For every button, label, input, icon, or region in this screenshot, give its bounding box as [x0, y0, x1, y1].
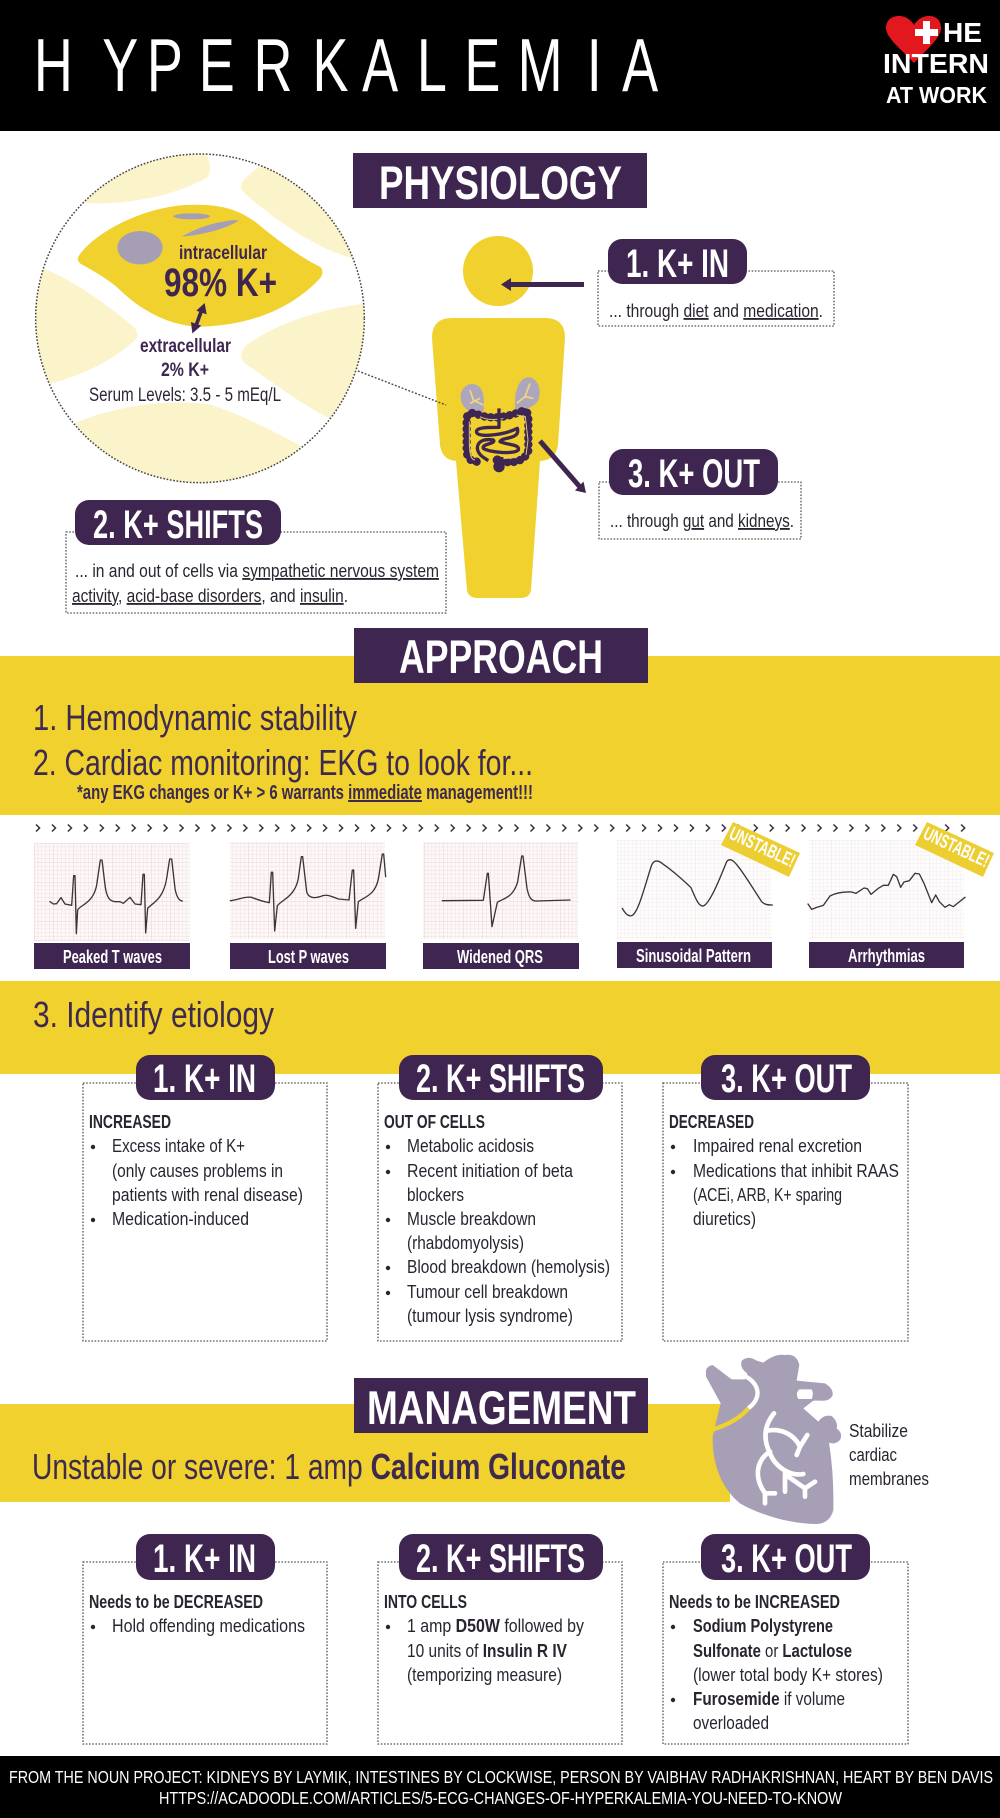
text: stabilize cardiac membranes: Stabilize — [849, 1420, 908, 1441]
logo: The Intern at Work: AT WORK — [886, 82, 987, 108]
etiology panel: K+ shifts: blockers — [407, 1184, 464, 1205]
etiology panel: K+ shifts: Metabolic acidosis — [407, 1135, 534, 1156]
text: stabilize cardiac membranes: membranes — [849, 1468, 929, 1489]
etiology panel: K+ out: DECREASED — [669, 1111, 754, 1132]
management panel: K+ shifts — [378, 1534, 622, 1744]
callout: K+ shifts: ... in and out of cells via sympathetic nervous system — [75, 560, 439, 581]
ekg: lost P waves: Lost P waves — [268, 947, 349, 967]
management panel: K+ in: Hold offending medications — [112, 1615, 305, 1636]
callout: K+ in: ... through diet and medication. — [609, 300, 823, 321]
management panel: K+ out: overloaded — [693, 1712, 769, 1733]
etiology panel: K+ in — [83, 1055, 327, 1341]
footer credits: HTTPS://ACADOODLE.COM/ARTICLES/5-ECG-CHANGES-OF-HYPERKALEMIA-YOU-NEED-TO-KNOW — [159, 1788, 842, 1808]
management panel: K+ out — [663, 1534, 908, 1744]
band: identify etiology: 3. Identify etiology — [33, 994, 274, 1035]
heading: Management: MANAGEMENT — [367, 1381, 636, 1434]
etiology panel: K+ shifts: Tumour cell breakdown — [407, 1281, 568, 1302]
kidneys and intestines — [461, 377, 540, 472]
callout: K+ shifts: activity, acid-base disorders, and insulin. — [72, 585, 348, 606]
ekg: widened QRS: Widened QRS — [457, 947, 543, 967]
logo: The Intern at Work: INTERN — [883, 48, 989, 79]
ekg: peaked T waves — [34, 843, 190, 969]
management panel: K+ shifts: 1 amp D50W followed by — [407, 1615, 585, 1636]
management panel: K+ in: Needs to be DECREASED — [89, 1591, 263, 1612]
ekg: lost P waves — [230, 842, 386, 969]
badge: unstable (sinusoidal) — [721, 822, 800, 877]
etiology panel: K+ out: (ACEi, ARB, K+ sparing — [693, 1184, 842, 1205]
label: extracellular: extracellular — [140, 336, 231, 357]
body — [432, 318, 565, 598]
ekg: arrhythmias: Arrhythmias — [848, 946, 925, 966]
etiology panel: K+ shifts: 2. K+ SHIFTS — [416, 1057, 585, 1101]
note: *any EKG changes or K+ > 6 warrants immediate management!!! — [77, 782, 533, 804]
cell magnifier circle — [32, 145, 368, 488]
etiology panel: K+ in: patients with renal disease) — [112, 1184, 303, 1205]
management panel: K+ out: (lower total body K+ stores) — [693, 1664, 883, 1685]
management panel: K+ out: 3. K+ OUT — [721, 1537, 852, 1581]
footer credits — [0, 1756, 1000, 1818]
band: management — [0, 1378, 730, 1502]
callout: K+ out — [599, 449, 801, 539]
callout: K+ shifts: 2. K+ SHIFTS — [93, 503, 263, 547]
label: 2% K+: 2% K+ — [161, 360, 209, 381]
ekg: widened QRS — [423, 842, 579, 969]
etiology panel: K+ out: diuretics) — [693, 1208, 756, 1229]
step 2: 2. Cardiac monitoring: EKG to look for... — [33, 742, 533, 783]
etiology panel: K+ shifts: (tumour lysis syndrome) — [407, 1305, 573, 1326]
etiology panel: K+ out — [663, 1055, 908, 1341]
heading: Approach: APPROACH — [399, 630, 603, 683]
etiology panel: K+ shifts: Recent initiation of beta — [407, 1160, 574, 1181]
management panel: K+ out: Sodium Polystyrene — [693, 1615, 833, 1636]
etiology panel: K+ in: Medication-induced — [112, 1208, 249, 1229]
management panel: K+ shifts: (temporizing measure) — [407, 1664, 562, 1685]
band: identify etiology — [0, 981, 1000, 1074]
management panel: K+ shifts: 2. K+ SHIFTS — [416, 1537, 585, 1581]
band: approach — [0, 628, 1000, 815]
etiology panel: K+ out: Medications that inhibit RAAS — [693, 1160, 899, 1181]
etiology panel: K+ shifts — [378, 1055, 622, 1341]
etiology panel: K+ shifts: (rhabdomyolysis) — [407, 1232, 524, 1253]
management panel: K+ shifts: INTO CELLS — [384, 1591, 467, 1612]
text: stabilize cardiac membranes: cardiac — [849, 1444, 897, 1465]
management panel: K+ out: Sulfonate or Lactulose — [693, 1640, 852, 1661]
organelle — [182, 220, 239, 237]
icon: heart — [706, 1355, 841, 1524]
yellow cell — [78, 205, 322, 327]
dotted connector — [358, 371, 446, 405]
callout: K+ in — [598, 239, 834, 326]
etiology panel: K+ shifts: OUT OF CELLS — [384, 1111, 485, 1132]
head — [463, 236, 533, 306]
logo: The Intern at Work: HE — [943, 17, 982, 48]
management panel: K+ shifts: 10 units of Insulin R IV — [407, 1640, 568, 1661]
etiology panel: K+ out: Impaired renal excretion — [693, 1135, 862, 1156]
management panel: K+ in: 1. K+ IN — [153, 1537, 256, 1581]
callout: K+ in: 1. K+ IN — [626, 242, 729, 286]
calcium gluconate line: Unstable or severe: 1 amp Calcium Gluconate — [32, 1446, 626, 1487]
person figure — [432, 236, 565, 598]
arrow: K+ out — [540, 441, 586, 493]
ekg: peaked T waves: Peaked T waves — [63, 947, 162, 967]
ekg: sinusoidal pattern: Sinusoidal Pattern — [636, 946, 751, 966]
label: 98% K+: 98% K+ — [164, 261, 277, 305]
arrow: K+ in — [501, 278, 584, 291]
etiology panel: K+ in: (only causes problems in — [112, 1160, 283, 1181]
step 1: 1. Hemodynamic stability — [33, 697, 357, 738]
label: intracellular: intracellular — [179, 243, 267, 264]
etiology panel: K+ shifts: Blood breakdown (hemolysis) — [407, 1256, 610, 1277]
heading: Physiology: PHYSIOLOGY — [379, 156, 622, 209]
title: HYPERKALEMIA — [34, 23, 658, 107]
management panel: K+ out: Furosemide if volume — [693, 1688, 845, 1709]
etiology panel: K+ shifts: Muscle breakdown — [407, 1208, 536, 1229]
callout: K+ out: 3. K+ OUT — [628, 452, 760, 496]
management panel: K+ in — [83, 1534, 327, 1744]
management panel: K+ out: Needs to be INCREASED — [669, 1591, 840, 1612]
badge: unstable (sinusoidal): UNSTABLE! — [726, 823, 798, 872]
logo: The Intern at Work — [883, 16, 989, 108]
callout: K+ out: ... through gut and kidneys. — [610, 510, 794, 531]
double arrow — [191, 303, 207, 333]
callout: K+ shifts — [66, 500, 446, 613]
text: stabilize cardiac membranes — [849, 1420, 929, 1489]
etiology panel: K+ in: Excess intake of K+ — [112, 1135, 245, 1156]
etiology panel: K+ out: 3. K+ OUT — [721, 1057, 852, 1101]
etiology panel: K+ in: INCREASED — [89, 1111, 171, 1132]
ekg: arrhythmias — [808, 840, 965, 968]
organelle — [173, 213, 210, 219]
ekg: sinusoidal pattern — [617, 840, 772, 968]
nucleus — [117, 231, 163, 264]
etiology panel: K+ in: 1. K+ IN — [153, 1057, 256, 1101]
label: serum levels: Serum Levels: 3.5 - 5 mEq/L — [89, 385, 281, 406]
header bar — [0, 0, 1000, 131]
